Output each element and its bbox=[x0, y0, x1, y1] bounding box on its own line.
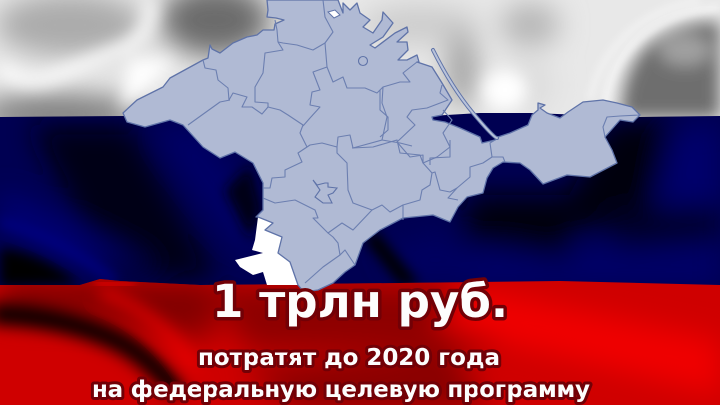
background: flag blue stripe bbox=[0, 110, 720, 295]
map: lake in the north bbox=[328, 10, 340, 18]
map: Kerch bridge line bbox=[433, 50, 497, 138]
map: Sevastopol in white bbox=[235, 217, 298, 285]
subtitle line 2: на федеральную целевую программу bbox=[92, 377, 590, 403]
subtitle line 1: потратят до 2020 года bbox=[198, 345, 500, 371]
headline: amount: 1 трлн руб. bbox=[212, 275, 508, 328]
map: district borders bbox=[188, 0, 640, 283]
map: small lake contour bbox=[358, 56, 368, 66]
map: Crimea bbox=[123, 0, 640, 292]
map: peninsula outline bbox=[123, 0, 640, 292]
background: flag white stripe bbox=[0, 0, 720, 117]
map: Simferopol contour bbox=[313, 180, 337, 203]
background: flag red stripe bbox=[0, 275, 720, 405]
